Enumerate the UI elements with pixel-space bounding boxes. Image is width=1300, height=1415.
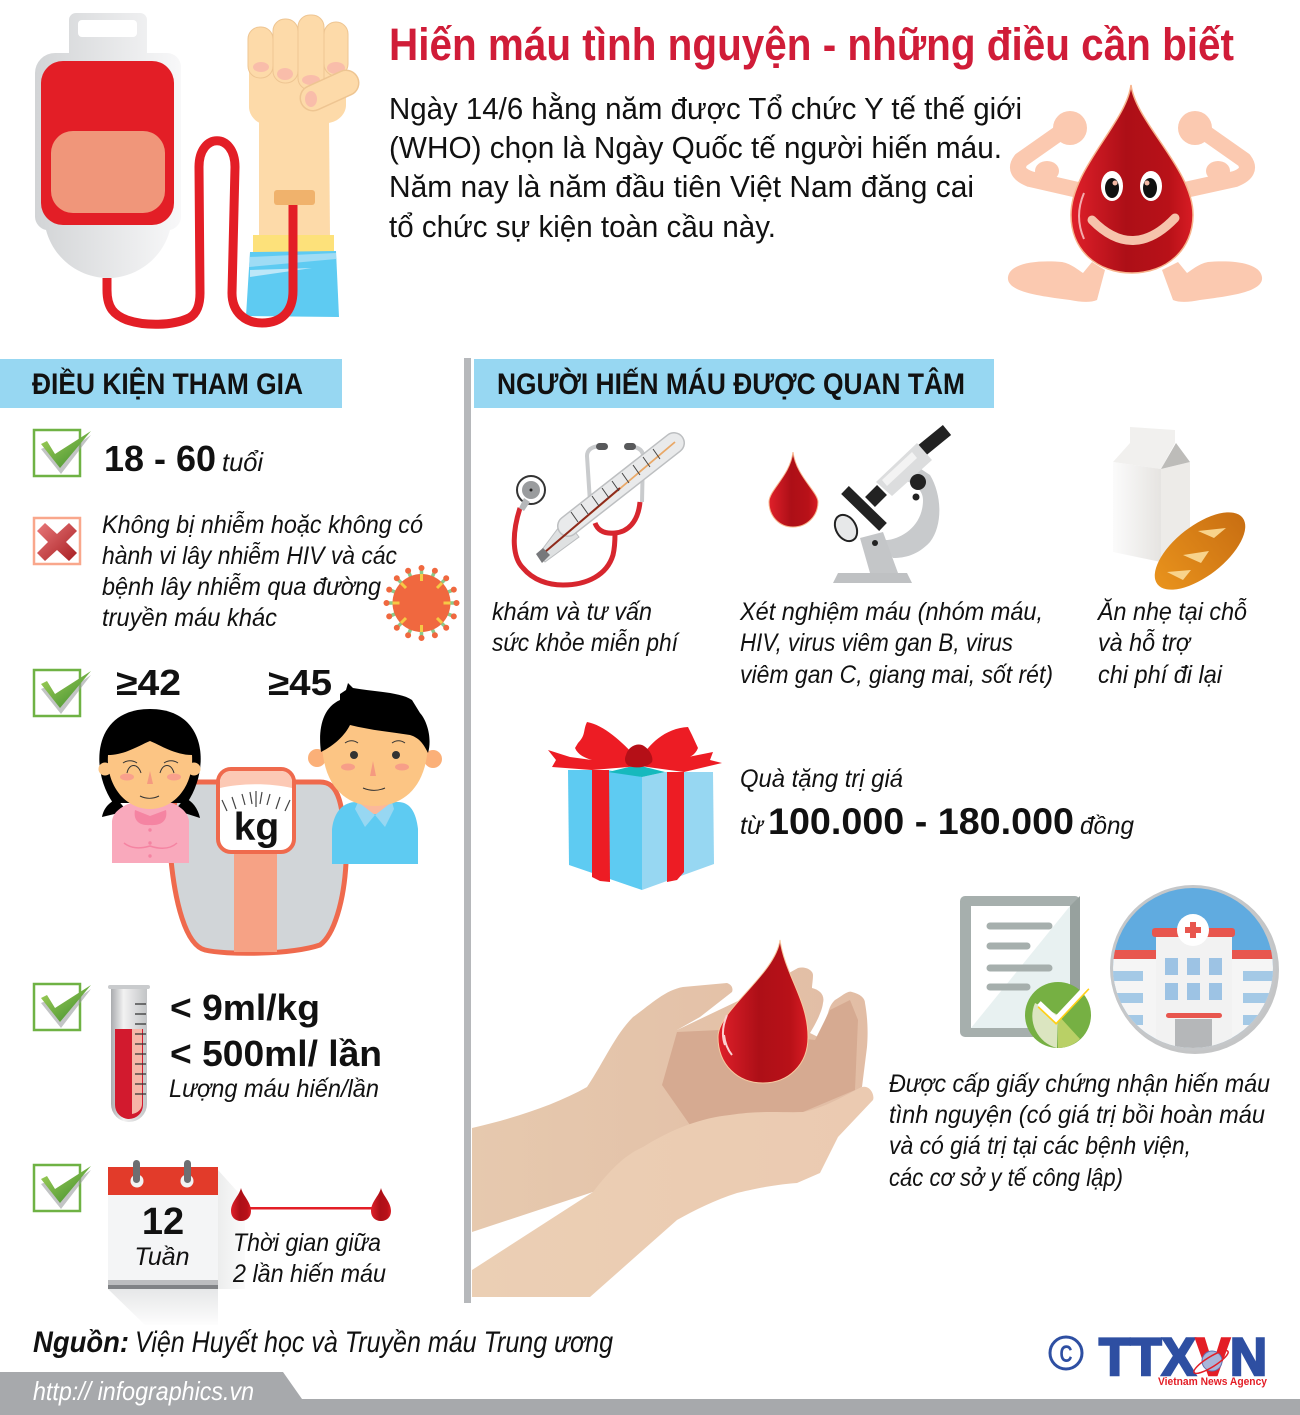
icon: virus (386, 568, 457, 638)
scale unit: kg (234, 806, 279, 849)
text (740, 765, 1134, 842)
intro text: Ngày 14/6 hằng năm được Tổ chức Y tế thế giới (389, 91, 1022, 126)
icon: check box (34, 670, 91, 716)
text: Xét nghiệm máu (nhóm máu, (739, 598, 1043, 626)
text (889, 1070, 1270, 1192)
age text: tuổi (222, 447, 264, 477)
icon: microscope (830, 430, 947, 583)
icon: check box (34, 1165, 91, 1211)
infection text: truyền máu khác (102, 604, 277, 632)
icon: test tube (108, 985, 150, 1122)
icon: gift box (548, 722, 722, 890)
heading: conditions (0, 359, 342, 408)
heading: donor care (474, 359, 994, 408)
text: Được cấp giấy chứng nhận hiến máu (889, 1070, 1270, 1098)
panel: blood volume condition (34, 984, 382, 1122)
agency name: TTXVN (1099, 1328, 1267, 1387)
text: chi phí đi lại (1098, 661, 1223, 689)
panel: blood test (739, 430, 1053, 689)
illustration: hands holding a blood drop (472, 940, 873, 1297)
weight value women: ≥42 (116, 662, 181, 703)
text: đồng (1080, 812, 1134, 840)
text: Quà tặng trị giá (740, 765, 903, 793)
intro text (389, 91, 1022, 244)
panel: age condition (34, 430, 264, 479)
panel: gift (548, 722, 1134, 890)
infection text: Không bị nhiễm hoặc không có (102, 510, 423, 539)
infection text (102, 510, 423, 632)
heading: conditions: ĐIỀU KIỆN THAM GIA (32, 367, 303, 401)
panel: free health check (492, 442, 680, 657)
front hand (472, 1087, 873, 1297)
held drop (718, 940, 808, 1083)
logo: TTXVN (1050, 1328, 1268, 1388)
agency subtitle: Vietnam News Agency (1158, 1376, 1268, 1388)
text (492, 598, 680, 657)
text (1096, 597, 1247, 689)
calendar value: 12 (142, 1201, 184, 1243)
panel: weight condition (34, 662, 442, 953)
text: và hỗ trợ (1098, 628, 1192, 657)
copyright mark (1050, 1337, 1082, 1369)
palm shading (662, 1000, 858, 1125)
text: Ăn nhẹ tại chỗ (1096, 597, 1247, 626)
volume text (169, 987, 382, 1103)
intro text: (WHO) chọn là Ngày Quốc tế người hiến máu. (389, 130, 1002, 165)
icon: certificate (960, 896, 1091, 1048)
calendar unit: Tuần (134, 1243, 190, 1271)
intro text: tổ chức sự kiện toàn cầu này. (389, 209, 776, 244)
weight value men: ≥45 (268, 662, 332, 703)
text (739, 598, 1053, 689)
intro text: Năm nay là năm đầu tiên Việt Nam đăng cai (389, 169, 974, 204)
icon: man (308, 683, 442, 864)
text: và có giá trị tại các bệnh viện, (889, 1132, 1191, 1160)
icon: milk carton (1113, 427, 1190, 562)
age text (104, 438, 264, 479)
interval text: Thời gian giữa (233, 1229, 381, 1257)
icon: blood tube (107, 141, 293, 324)
text: tình nguyện (có giá trị bồi hoàn máu (889, 1101, 1265, 1129)
icon: blood bag (35, 13, 181, 278)
text: HIV, virus viêm gan B, virus (740, 629, 1013, 657)
icon: cross box (34, 518, 80, 564)
infection text: hành vi lây nhiễm HIV và các (102, 541, 397, 570)
icon: check box (34, 984, 91, 1030)
text: 100.000 - 180.000 (768, 801, 1074, 842)
interval line with drops (231, 1188, 391, 1221)
section divider (464, 358, 471, 1303)
panel: light meal (1096, 427, 1258, 689)
copyright mark: C (1060, 1341, 1072, 1368)
volume text: Lượng máu hiến/lần (169, 1075, 379, 1103)
panel: certificate (889, 885, 1280, 1192)
source note: Viện Huyết học và Truyền máu Trung ương (135, 1326, 613, 1359)
icon: stethoscope and thermometer (514, 442, 675, 585)
footer bar (0, 1372, 1300, 1415)
text: khám và tư vấn (492, 598, 652, 626)
heading: donor care: NGƯỜI HIẾN MÁU ĐƯỢC QUAN TÂM (497, 367, 965, 401)
mascot body (1071, 85, 1193, 273)
source note: Nguồn: (33, 1326, 129, 1359)
interval text (232, 1229, 386, 1288)
icon: hospital (1110, 885, 1280, 1060)
text: các cơ sở y tế công lập) (889, 1164, 1123, 1192)
header illustration: blood bag and arm (35, 13, 348, 324)
icon: check box (34, 430, 91, 476)
mascot fists and legs (1008, 111, 1262, 302)
infection text: bệnh lây nhiễm qua đường (102, 572, 381, 601)
icon: bathroom scale (171, 769, 346, 953)
panel: donation interval condition (34, 1160, 391, 1325)
icon: calendar (108, 1160, 245, 1325)
age text: 18 - 60 (104, 438, 216, 479)
icon: blood drop mascot (1008, 85, 1262, 302)
footer bar: http:// infographics.vn (33, 1376, 254, 1406)
text: viêm gan C, giang mai, sốt rét) (740, 661, 1053, 689)
text: sức khỏe miễn phí (492, 628, 680, 657)
volume text: < 500ml/ lần (170, 1033, 382, 1074)
globe (1191, 1347, 1231, 1377)
interval text: 2 lần hiến máu (232, 1260, 386, 1288)
icon: raised fist and arm (246, 15, 348, 317)
icon: blood drop (769, 452, 818, 527)
icon: bread (1142, 498, 1258, 604)
back hand (472, 967, 868, 1232)
volume text: < 9ml/kg (170, 987, 320, 1028)
icon: woman (98, 709, 201, 863)
text: từ (740, 812, 765, 840)
mascot arms (1018, 134, 1247, 190)
panel: infection condition (34, 510, 457, 638)
